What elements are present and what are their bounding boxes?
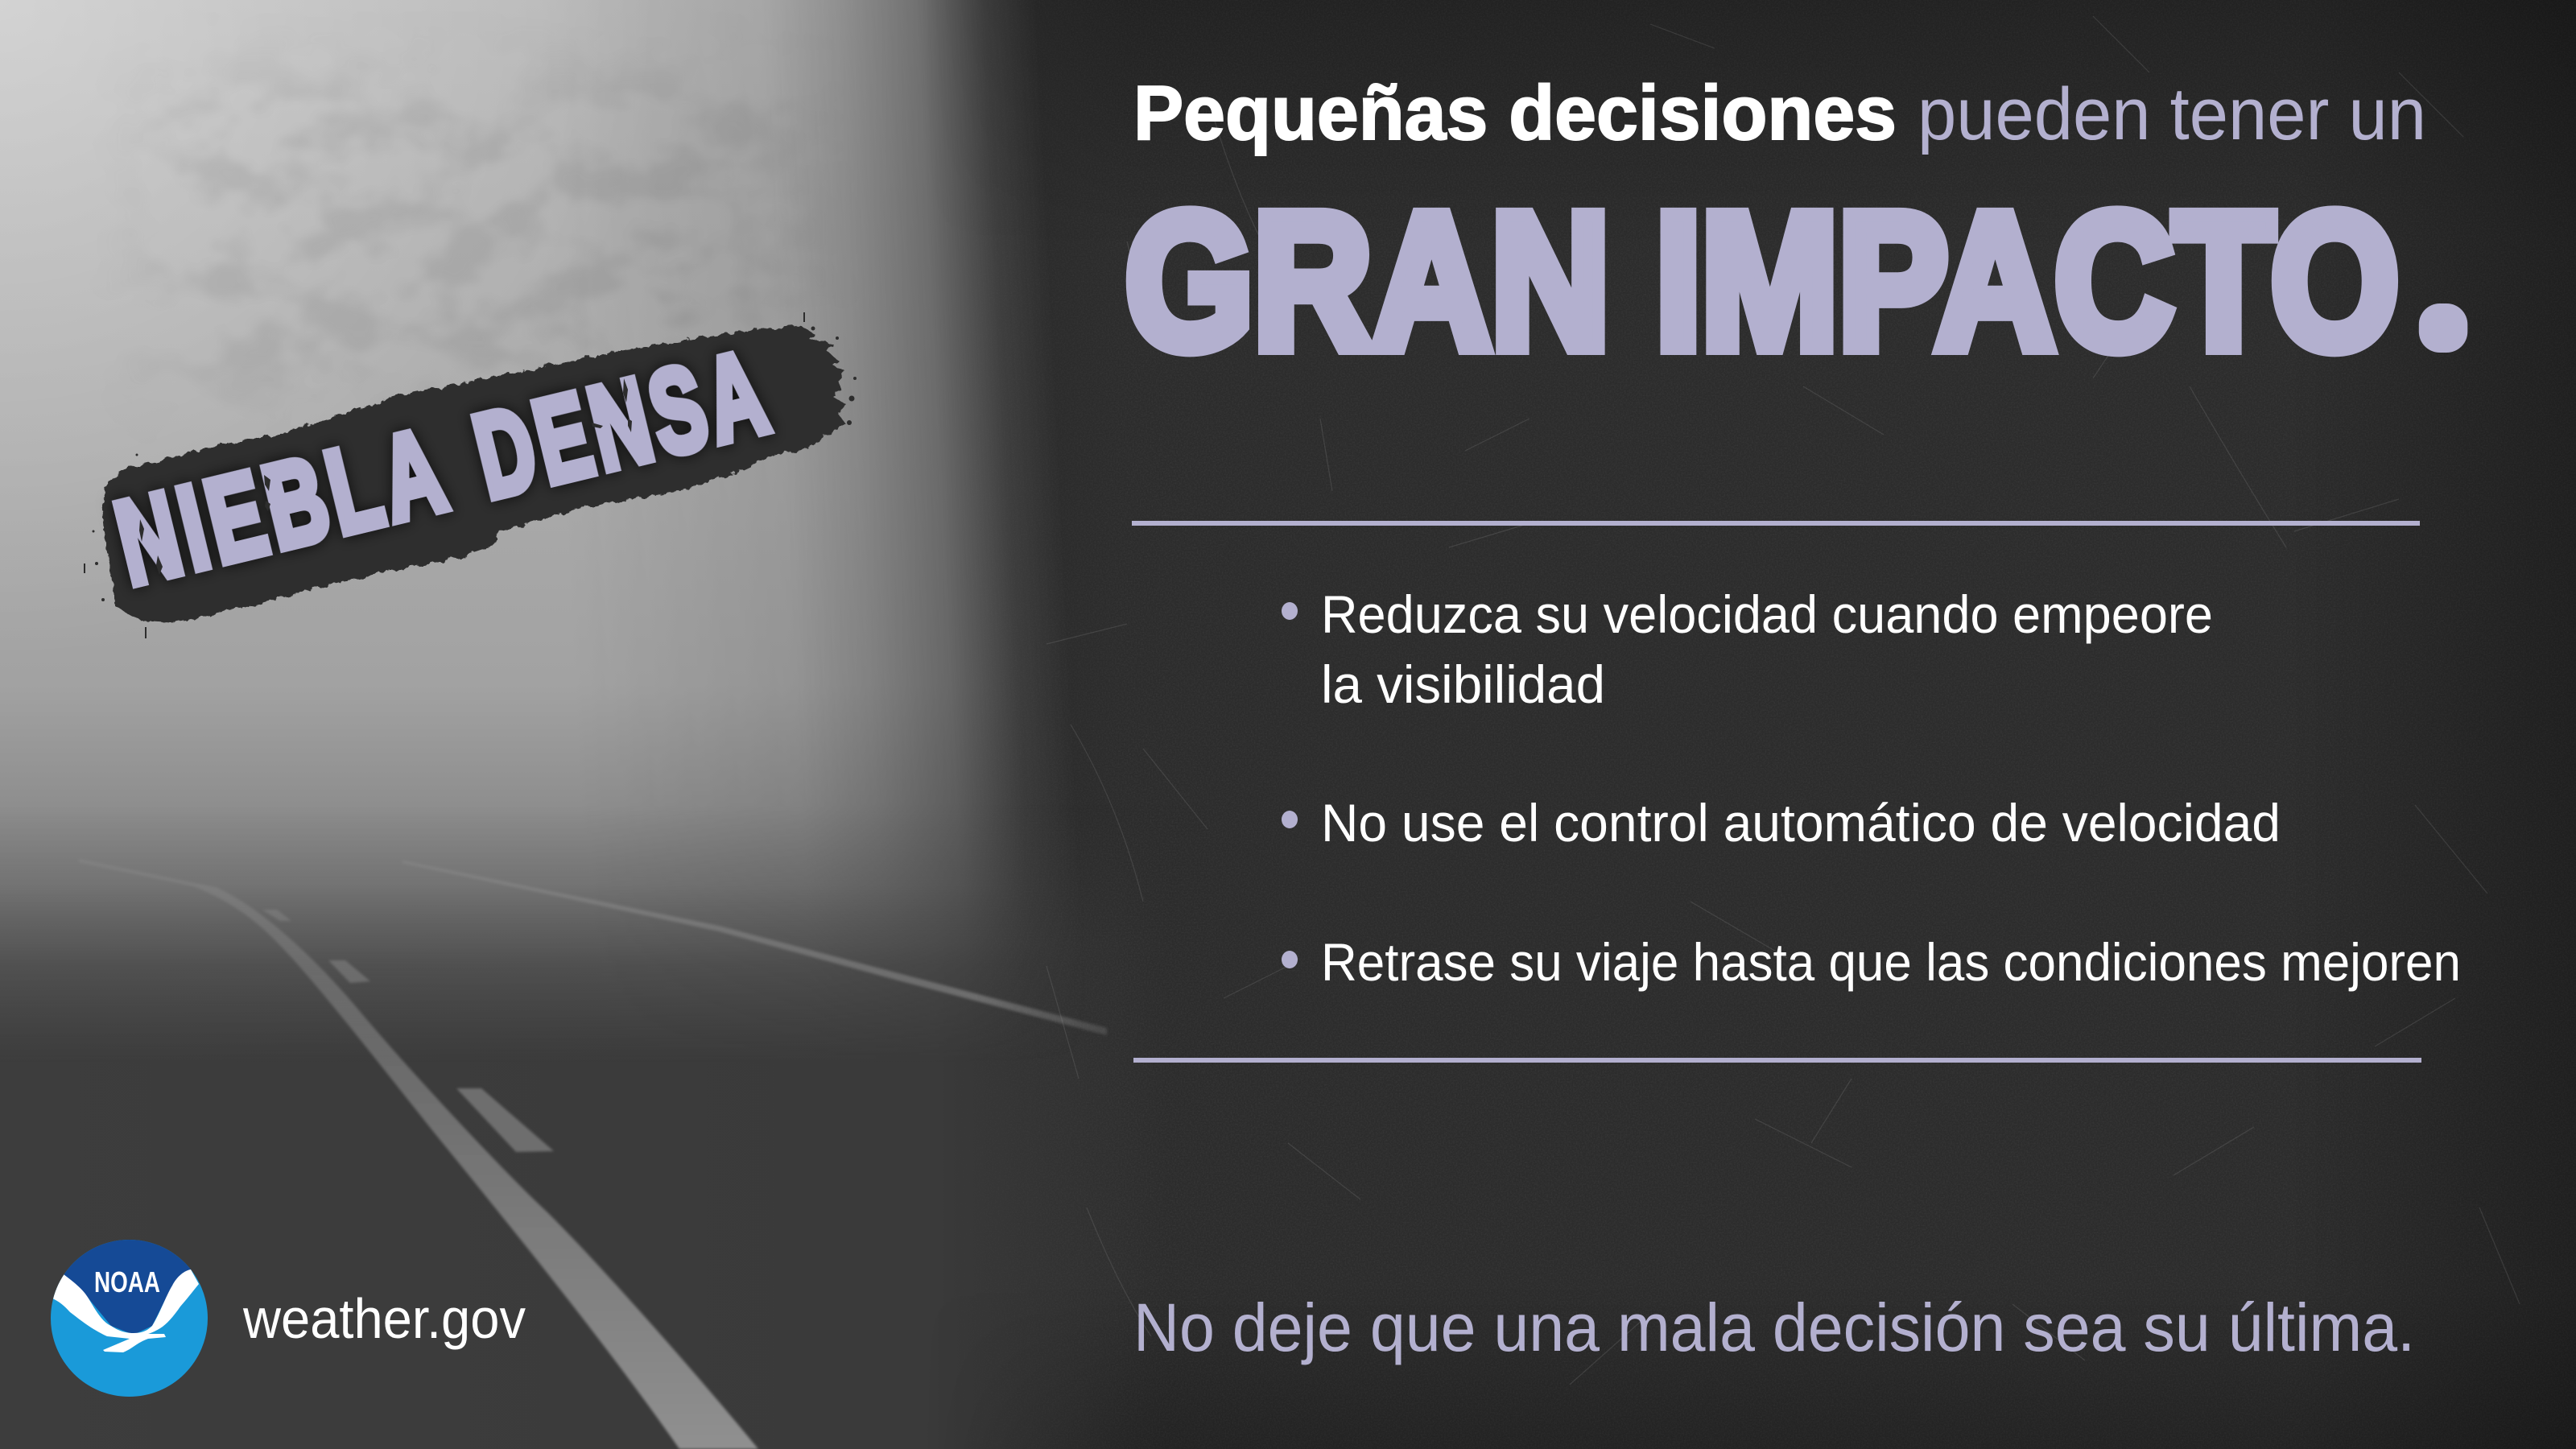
road dashes (262, 910, 554, 1152)
road surface (0, 917, 1026, 1449)
logo white swoosh bird (48, 1269, 199, 1352)
badge text: DENSA (463, 324, 783, 523)
divider top (1132, 521, 2420, 526)
road solid white line (79, 859, 758, 1449)
headline: GRAN IMPACTO: . (2437, 288, 2450, 342)
logo lower blue (51, 1240, 208, 1397)
logo: NOAA (48, 1236, 211, 1397)
bullet 1 (1282, 584, 2213, 714)
road far edge line (402, 861, 1107, 1035)
badge text (105, 324, 783, 610)
badge: NIEBLA DENSA (84, 312, 857, 638)
chalkboard texture: noise (1084, 7, 2536, 1438)
badge text: NIEBLA (105, 402, 462, 610)
bullet 3: Retrase su viaje hasta que las condiciones mejoren (1321, 932, 2461, 992)
closing message: No deje que una mala decisión sea su última. (1133, 1290, 2415, 1365)
badge splatter specks (84, 312, 857, 638)
bullet 1: la visibilidad (1321, 654, 1605, 714)
brush stroke background (101, 326, 847, 622)
website label: weather.gov (242, 1287, 526, 1350)
logo NOAA wordmark: NOAA (94, 1265, 160, 1298)
badge letter wear flecks (139, 378, 632, 575)
bullet 1: Reduzca su velocidad cuando empeore (1321, 584, 2213, 644)
headline line: small decisions: Pequeñas decisiones (1133, 70, 1897, 156)
chalkboard vignettes (1074, 0, 2576, 1449)
headline line: can have a: pueden tener un (1918, 73, 2426, 155)
chalkboard scratches (1046, 16, 2520, 1385)
logo upper navy (64, 1240, 191, 1333)
tree silhouettes in fog (180, 81, 762, 378)
bullet list (1282, 584, 2461, 992)
divider bottom (1133, 1058, 2421, 1063)
panel: fog photo with road (0, 0, 1208, 1449)
bullet 2: No use el control automático de velocidad (1321, 793, 2281, 852)
fog layer (0, 0, 1047, 1019)
